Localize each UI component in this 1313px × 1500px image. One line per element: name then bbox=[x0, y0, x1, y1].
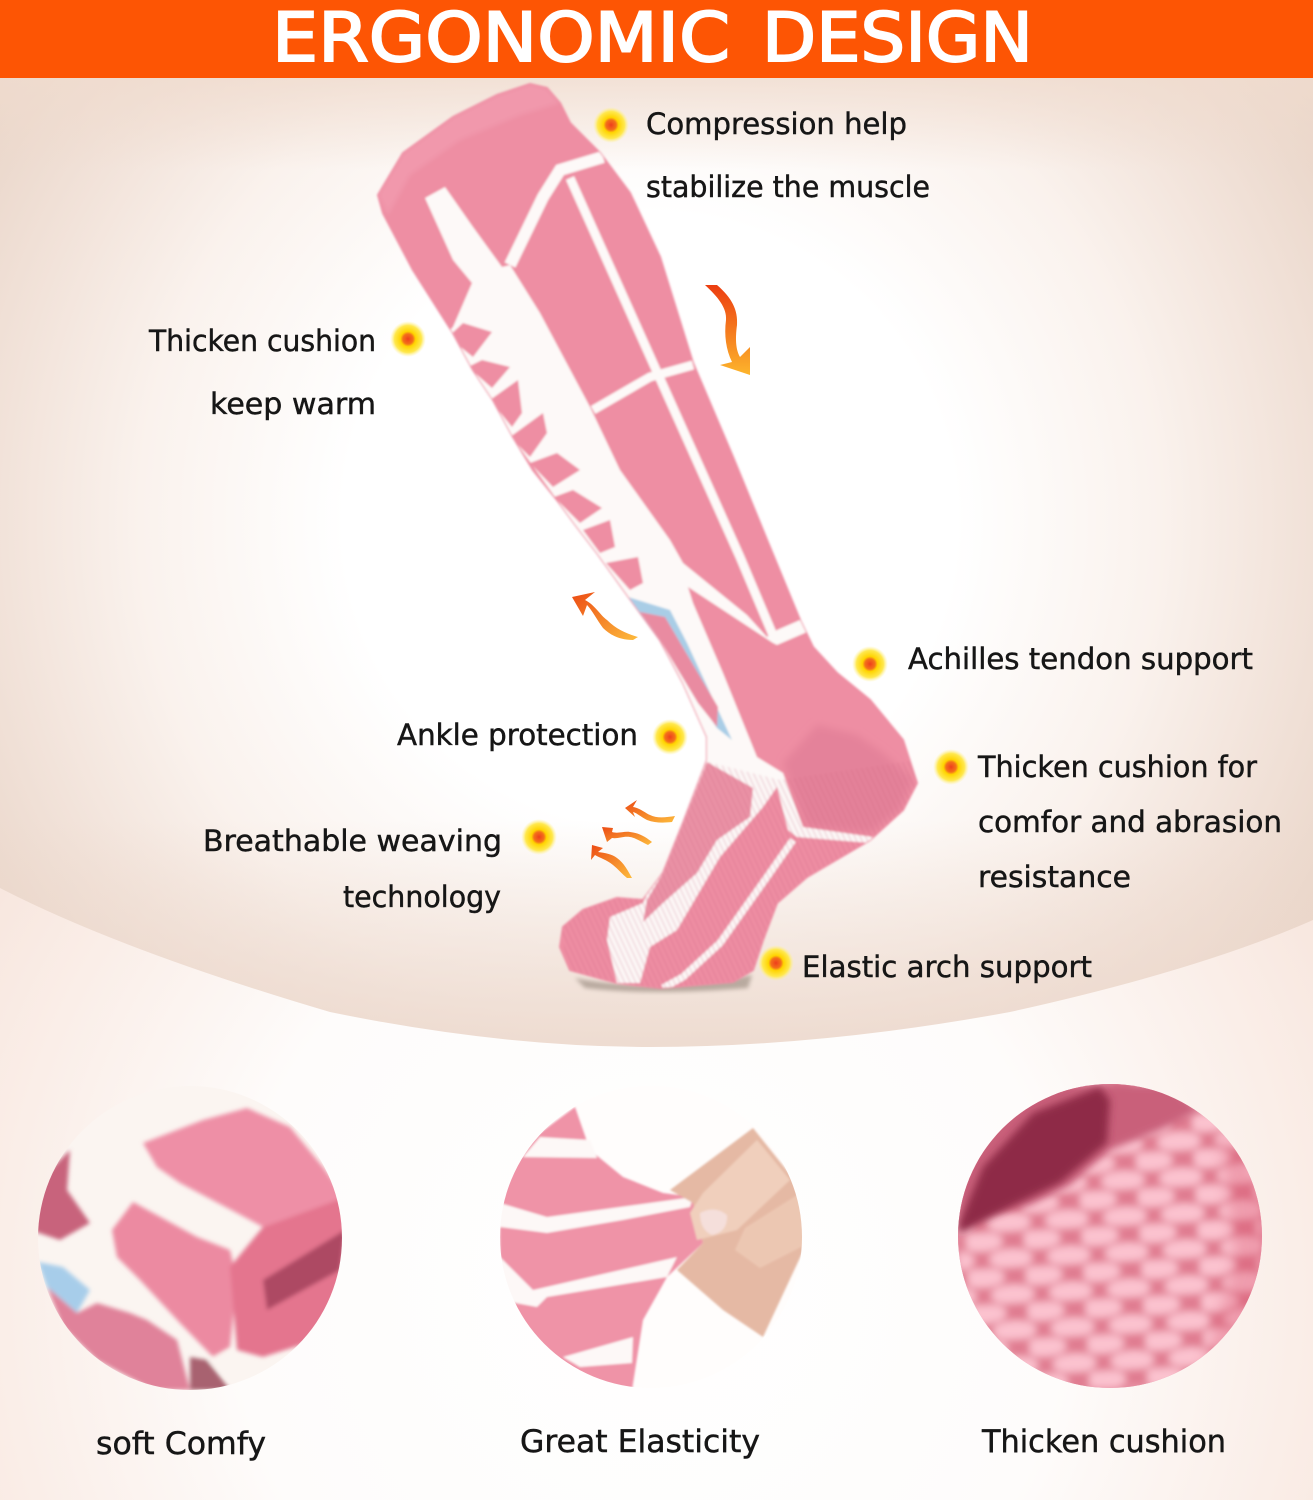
callout: compression: stabilize the muscle bbox=[646, 170, 930, 204]
background top shading bbox=[0, 78, 1313, 178]
callout: thicken cushion comfort: comfor and abrasion bbox=[978, 805, 1282, 839]
callout: breathable bbox=[203, 819, 557, 914]
arrow: ankle up bbox=[572, 592, 638, 640]
instep panel bbox=[643, 762, 753, 922]
callout: thicken cushion keep warm bbox=[148, 321, 426, 421]
heel cushion shade bbox=[787, 728, 908, 830]
lower background curve bbox=[0, 888, 1313, 1500]
cross stripe bbox=[593, 365, 693, 410]
cuff highlight bbox=[382, 87, 554, 208]
panel: great elasticity bbox=[500, 1086, 805, 1390]
sock illustration bbox=[378, 84, 917, 990]
callout: thicken cushion keep warm: keep warm bbox=[210, 387, 376, 421]
callout: compression: Compression help bbox=[646, 107, 907, 141]
callout: breathable: technology bbox=[343, 880, 501, 914]
title banner: DESIGN bbox=[762, 0, 1033, 78]
side cushion teeth bbox=[448, 323, 643, 590]
sock shadow bbox=[575, 975, 752, 992]
title banner: ERGONOMIC bbox=[272, 0, 730, 78]
arch stripe bbox=[663, 840, 793, 988]
callout: thicken cushion comfort: resistance bbox=[978, 860, 1131, 894]
callout: compression bbox=[593, 107, 930, 204]
panel: soft comfy bbox=[30, 1086, 345, 1390]
background edge shading bbox=[0, 78, 1313, 1048]
callout: thicken cushion comfort bbox=[933, 749, 1282, 894]
label: great elasticity: Great Elasticity bbox=[520, 1424, 760, 1460]
label: thicken cushion: Thicken cushion bbox=[981, 1424, 1226, 1460]
callout: thicken cushion comfort: Thicken cushion for bbox=[977, 750, 1257, 784]
calf stripe bbox=[510, 157, 603, 265]
rib texture bbox=[606, 762, 872, 988]
callout: breathable: Breathable weaving bbox=[203, 824, 502, 858]
panel: thicken cushion bbox=[958, 1084, 1270, 1388]
long thin stripe bbox=[570, 178, 775, 640]
main white band bbox=[425, 187, 873, 983]
ankle pink panel bbox=[640, 612, 718, 727]
callout: arch: Elastic arch support bbox=[802, 950, 1092, 984]
icon: breathable arrows bbox=[591, 800, 675, 878]
callout: ankle: Ankle protection bbox=[397, 718, 638, 752]
callout: achilles: Achilles tendon support bbox=[908, 642, 1253, 676]
arrow: compression down bbox=[705, 285, 750, 375]
title banner bbox=[0, 0, 1313, 78]
ankle blue stripe bbox=[628, 597, 732, 740]
callout: thicken cushion keep warm: Thicken cushion bbox=[148, 324, 376, 358]
label: soft comfy: soft Comfy bbox=[96, 1426, 266, 1462]
